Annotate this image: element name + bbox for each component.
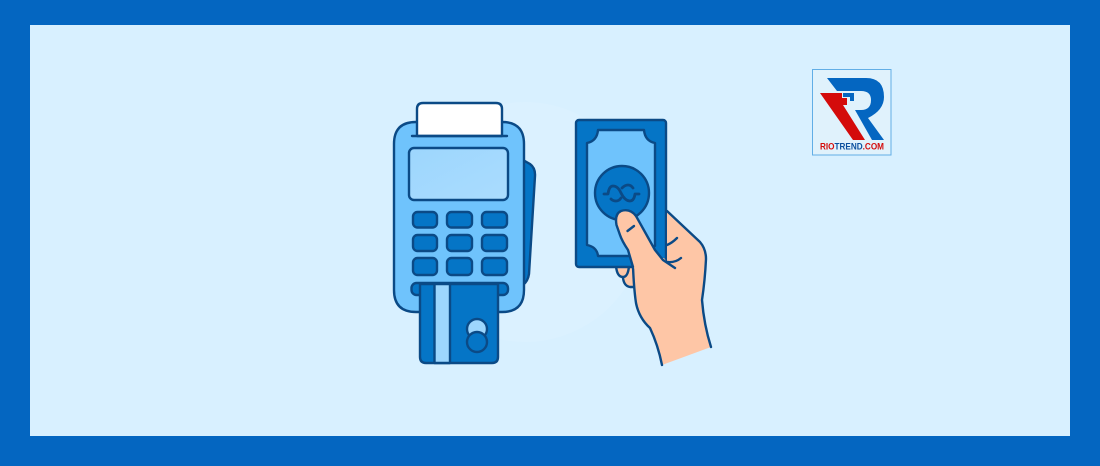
card stripe xyxy=(434,284,450,363)
logo blue corner mark xyxy=(843,93,854,101)
note inner panel xyxy=(587,130,655,256)
logo xyxy=(812,70,891,155)
illustration: payment terminal xyxy=(394,103,535,363)
fingers behind note xyxy=(616,266,635,287)
faint backdrop circle xyxy=(405,102,645,342)
credit card xyxy=(420,284,498,363)
wrist and palm edge xyxy=(633,267,662,365)
terminal screen xyxy=(409,148,508,200)
knuckle creases xyxy=(667,238,681,262)
thumb xyxy=(616,210,670,275)
logo red arrow xyxy=(820,93,865,140)
card chip circles xyxy=(467,319,487,339)
palm xyxy=(632,211,711,365)
illustration: hand holding banknote xyxy=(576,120,711,365)
coin with dollar sign xyxy=(595,166,649,220)
card behind terminal xyxy=(523,160,535,285)
paper slot line xyxy=(412,135,507,137)
hand outer edge xyxy=(667,211,711,347)
keypad xyxy=(413,212,507,275)
terminal body xyxy=(394,122,524,312)
logo blue R xyxy=(827,78,884,140)
logo box xyxy=(812,70,891,155)
card slot xyxy=(412,283,508,295)
thumb outline xyxy=(616,210,675,268)
banknote xyxy=(576,120,666,267)
logo wordmark: RIOTREND.COM xyxy=(820,142,884,152)
thumbnail crease xyxy=(628,226,634,231)
receipt paper xyxy=(417,103,502,136)
